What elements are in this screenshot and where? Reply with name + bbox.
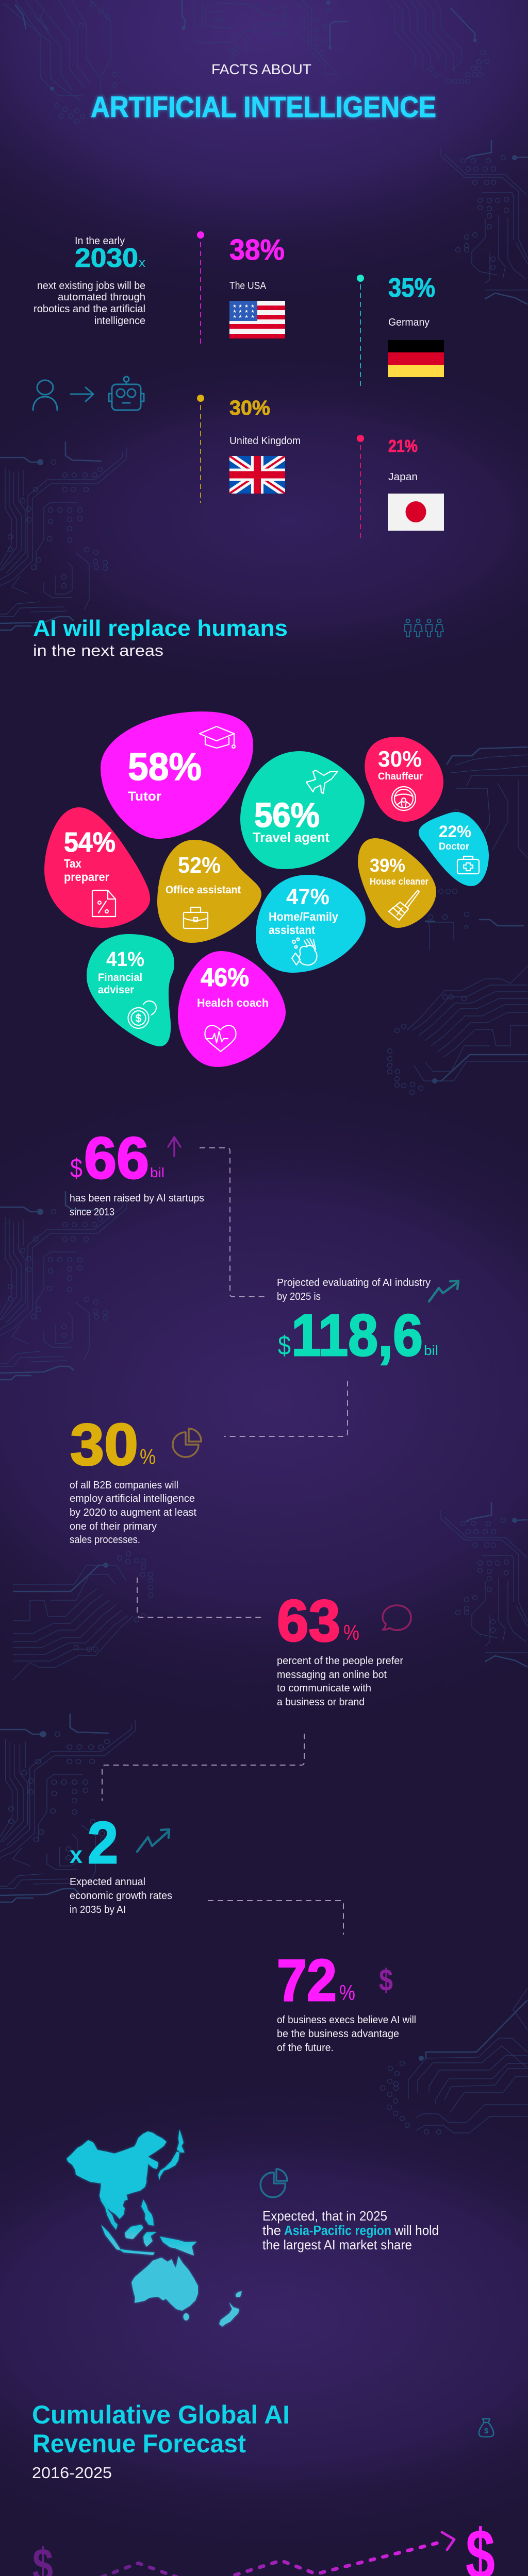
icon: US flag: ★ (251, 314, 255, 319)
icon: coins (128, 1001, 156, 1028)
panel: jobs automated intro: In the early (75, 235, 125, 247)
stat: $118,6 bil projected (277, 1277, 458, 1368)
panel: Health coach bubble: Healch coach (197, 996, 269, 1009)
panel: Financial adviser bubble (87, 934, 174, 1046)
stat: Germany 35%: Germany (388, 317, 430, 328)
stat: 30% of B2B companies: by 2020 to augment at least (70, 1507, 196, 1518)
icon: pie chart (260, 2169, 287, 2197)
stat: $118,6 bil projected: Projected evaluating of AI industry (277, 1277, 431, 1289)
panel: Asia-Pacific callout: Expected, that in 2025 (262, 2208, 387, 2224)
icon: US flag: ★ (251, 303, 255, 309)
panel: jobs automated intro: robotics and the artificial (34, 303, 145, 315)
panel: jobs automated intro: intelligence (94, 315, 145, 327)
stat: 30% of B2B companies (70, 1412, 201, 1546)
icon: US flag: ★ (244, 314, 249, 319)
icon: US flag: ★ (233, 309, 237, 314)
panel: jobs automated intro: next existing jobs will be (37, 280, 145, 292)
stat: 63% prefer messaging a bot (277, 1588, 411, 1708)
panel: Health coach bubble (178, 951, 286, 1067)
stat: Japan 21%: Japan (388, 471, 418, 483)
connector: dashed 30 to 63 (137, 1578, 265, 1617)
panel: Home/Family assistant bubble: assistant (269, 923, 315, 937)
panel: Asia-Pacific callout: the (262, 2223, 281, 2238)
stat: $118,6 bil projected: by 2025 is (277, 1291, 321, 1302)
stat: USA 38% (197, 231, 285, 347)
panel: Home/Family assistant bubble: 47% (286, 884, 329, 909)
stat: 63% prefer messaging a bot: 63 (277, 1588, 340, 1654)
icon: plane (306, 770, 338, 793)
icon: four people (405, 619, 443, 637)
stat: x2 economic growth: in 2035 by AI (70, 1904, 126, 1916)
panel: Office assistant bubble: 52% (178, 853, 221, 878)
stat: Japan 21%: 21% (388, 436, 418, 455)
icon: US flag: ★ (238, 303, 242, 309)
icon: dollar: $ (379, 1963, 393, 1997)
heading: AI will replace humans: AI will replace humans (33, 616, 288, 641)
stat: 30% of B2B companies: 30 (70, 1412, 138, 1478)
stat: $66 bil raised (70, 1126, 204, 1218)
icon: US flag: ★ (244, 303, 249, 309)
stat: 63% prefer messaging a bot: % (343, 1620, 359, 1645)
title: artificial intelligence: ARTIFICIAL INTELLIGENCE (91, 91, 436, 124)
panel: Home/Family assistant bubble (256, 875, 366, 973)
map: Asia-Pacific region (67, 2129, 242, 2327)
panel: Tutor bubble: Tutor (128, 789, 161, 804)
panel: Health coach bubble: 46% (201, 963, 249, 992)
panel: Travel agent bubble (240, 751, 365, 869)
stat: 2030x: 2030 (75, 243, 138, 273)
panel: Asia-Pacific callout (260, 2169, 439, 2252)
panel: Office assistant bubble: Office assistant (166, 884, 241, 896)
heading: cumulative global AI revenue forecast: Cumulative Global AI (32, 2400, 290, 2429)
stat: 30% of B2B companies: of all B2B companies will (70, 1480, 178, 1491)
stat: 63% prefer messaging a bot: to communicate with (277, 1683, 371, 1694)
subheading: years: 2016-2025 (32, 2464, 112, 2482)
panel: Doctor bubble: 22% (439, 822, 471, 841)
panel: Travel agent bubble: Travel agent (253, 829, 329, 845)
icon: broom (389, 890, 419, 920)
stat: $118,6 bil projected: $ (278, 1331, 291, 1361)
icon: German flag (388, 340, 444, 377)
stat: Germany 35% (357, 273, 444, 386)
connector: dashed x2 to 72 (208, 1901, 343, 1935)
stat: 63% prefer messaging a bot: a business or brand (277, 1697, 365, 1708)
panel: Tutor bubble (101, 711, 253, 839)
panel: House cleaner bubble: House cleaner (370, 876, 428, 887)
panel: Financial adviser bubble: Financial (98, 972, 142, 984)
stat: $66 bil raised: 66 (84, 1126, 149, 1191)
stat: $66 bil raised: $ (70, 1154, 82, 1183)
stat: $118,6 bil projected: 118,6 (291, 1303, 423, 1368)
panel: House cleaner bubble: 39% (370, 855, 405, 876)
icon: human replaced by robot (33, 377, 144, 410)
stat: 72% of business execs (277, 1948, 416, 2054)
stat: x2 economic growth (70, 1810, 172, 1916)
icon: graduation cap (200, 726, 235, 748)
icon: UK flag (229, 456, 285, 494)
icon: first aid kit (457, 856, 479, 874)
panel: Tax preparer bubble: 54% (64, 827, 116, 858)
panel: Doctor bubble: Doctor (439, 841, 470, 852)
stat: United Kingdom 30% (197, 395, 301, 503)
stat: 72% of business execs: of the future. (277, 2042, 334, 2054)
stat: 72% of business execs: be the business advantage (277, 2028, 399, 2040)
subheading: in the next areas: in the next areas (33, 641, 163, 659)
icon: US flag: ★ (238, 309, 242, 314)
icon: pie chart (173, 1429, 201, 1457)
stat: 63% prefer messaging a bot: percent of the people prefer (277, 1655, 403, 1667)
panel: Tax preparer bubble: Tax (64, 857, 81, 870)
icon: US flag: ★ (238, 314, 242, 319)
stat: United Kingdom 30%: 30% (229, 397, 270, 419)
panel: Tutor bubble: 58% (128, 745, 202, 788)
icon: US flag: ★ (233, 303, 237, 309)
panel: Tax preparer bubble: preparer (64, 870, 109, 884)
stat: Germany 35%: 35% (388, 273, 435, 303)
stat: 30% of B2B companies: one of their primary (70, 1521, 157, 1532)
icon: Japanese flag (388, 494, 444, 531)
icon: US flag: ★ (251, 309, 255, 314)
stat: 30% of B2B companies: sales processes. (70, 1534, 140, 1546)
icon: money bag (479, 2419, 493, 2437)
panel: Travel agent bubble: 56% (254, 796, 320, 835)
icon: money bag: $ (484, 2427, 489, 2435)
panel: Home/Family assistant bubble: Home/Family (269, 910, 338, 923)
icon: growth arrow (429, 1281, 458, 1301)
icon: steering wheel (392, 787, 416, 810)
stat: $66 bil raised: since 2013 (70, 1207, 114, 1218)
stat: x2 economic growth: economic growth rates (70, 1890, 172, 1902)
panel: Office assistant bubble (157, 840, 261, 943)
panel: Asia-Pacific callout: the largest AI market share (262, 2237, 412, 2252)
icon: US flag: ★ (233, 314, 237, 319)
connector: dashed 63 to x2 (102, 1734, 304, 1801)
panel: Chauffeur bubble (365, 737, 443, 822)
icon: speech bubble (383, 1605, 411, 1630)
icon: washing hands (292, 938, 317, 965)
icon: US flag: ★ (244, 309, 249, 314)
heading: cumulative global AI revenue forecast: Revenue Forecast (32, 2429, 246, 2458)
panel: House cleaner bubble (358, 838, 436, 928)
stat: x2 economic growth: 2 (88, 1810, 118, 1876)
panel: Asia-Pacific callout: Asia-Pacific region (284, 2223, 391, 2238)
stat: $118,6 bil projected: bil (424, 1343, 438, 1358)
panel: Tax preparer bubble (44, 807, 150, 928)
connector: dashed 118 to 30 (224, 1381, 348, 1436)
stat: 72% of business execs: 72 (277, 1948, 337, 2013)
panel: Chauffeur bubble: 30% (378, 747, 422, 772)
panel: Asia-Pacific callout: will hold (394, 2223, 439, 2238)
icon: heart with pulse (205, 1025, 236, 1052)
stat: 30% of B2B companies: % (140, 1445, 156, 1469)
stat: 72% of business execs: % (339, 1980, 355, 2005)
panel: Doctor bubble (419, 812, 489, 886)
icon: tax document (92, 890, 116, 917)
stat: $66 bil raised: has been raised by AI startups (70, 1193, 204, 1204)
stat: USA 38%: The USA (229, 280, 267, 292)
panel: Financial adviser bubble: adviser (98, 984, 134, 996)
icon: coins: $ (135, 1012, 142, 1025)
stat: USA 38%: 38% (229, 233, 285, 266)
stat: 63% prefer messaging a bot: messaging an online bot (277, 1669, 387, 1681)
panel: jobs automated intro (34, 235, 145, 327)
icon: arrow up (168, 1137, 180, 1156)
stat: United Kingdom 30%: United Kingdom (229, 435, 301, 447)
stat: x2 economic growth: x (70, 1841, 82, 1868)
stat: Japan 21% (357, 435, 444, 540)
stat: $66 bil raised: bil (150, 1165, 164, 1180)
panel: Chauffeur bubble: Chauffeur (378, 771, 423, 782)
stat: 30% of B2B companies: employ artificial intelligence (70, 1493, 195, 1504)
panel: Financial adviser bubble: 41% (106, 948, 144, 971)
icon: briefcase (184, 907, 208, 928)
icon: growth arrow (137, 1829, 169, 1852)
chart: revenue growth trail (32, 2514, 495, 2576)
icon: US flag (229, 301, 285, 338)
connector: dashed 66 to 118 (200, 1148, 266, 1297)
panel: jobs automated intro: automated through (58, 292, 145, 303)
heading: facts about: FACTS ABOUT (211, 61, 311, 77)
stat: x2 economic growth: Expected annual (70, 1876, 145, 1888)
stat: 72% of business execs: of business execs believe AI will (277, 2014, 416, 2026)
heading: cumulative global AI revenue forecast (32, 2400, 290, 2458)
stat: 2030x: x (139, 256, 145, 270)
